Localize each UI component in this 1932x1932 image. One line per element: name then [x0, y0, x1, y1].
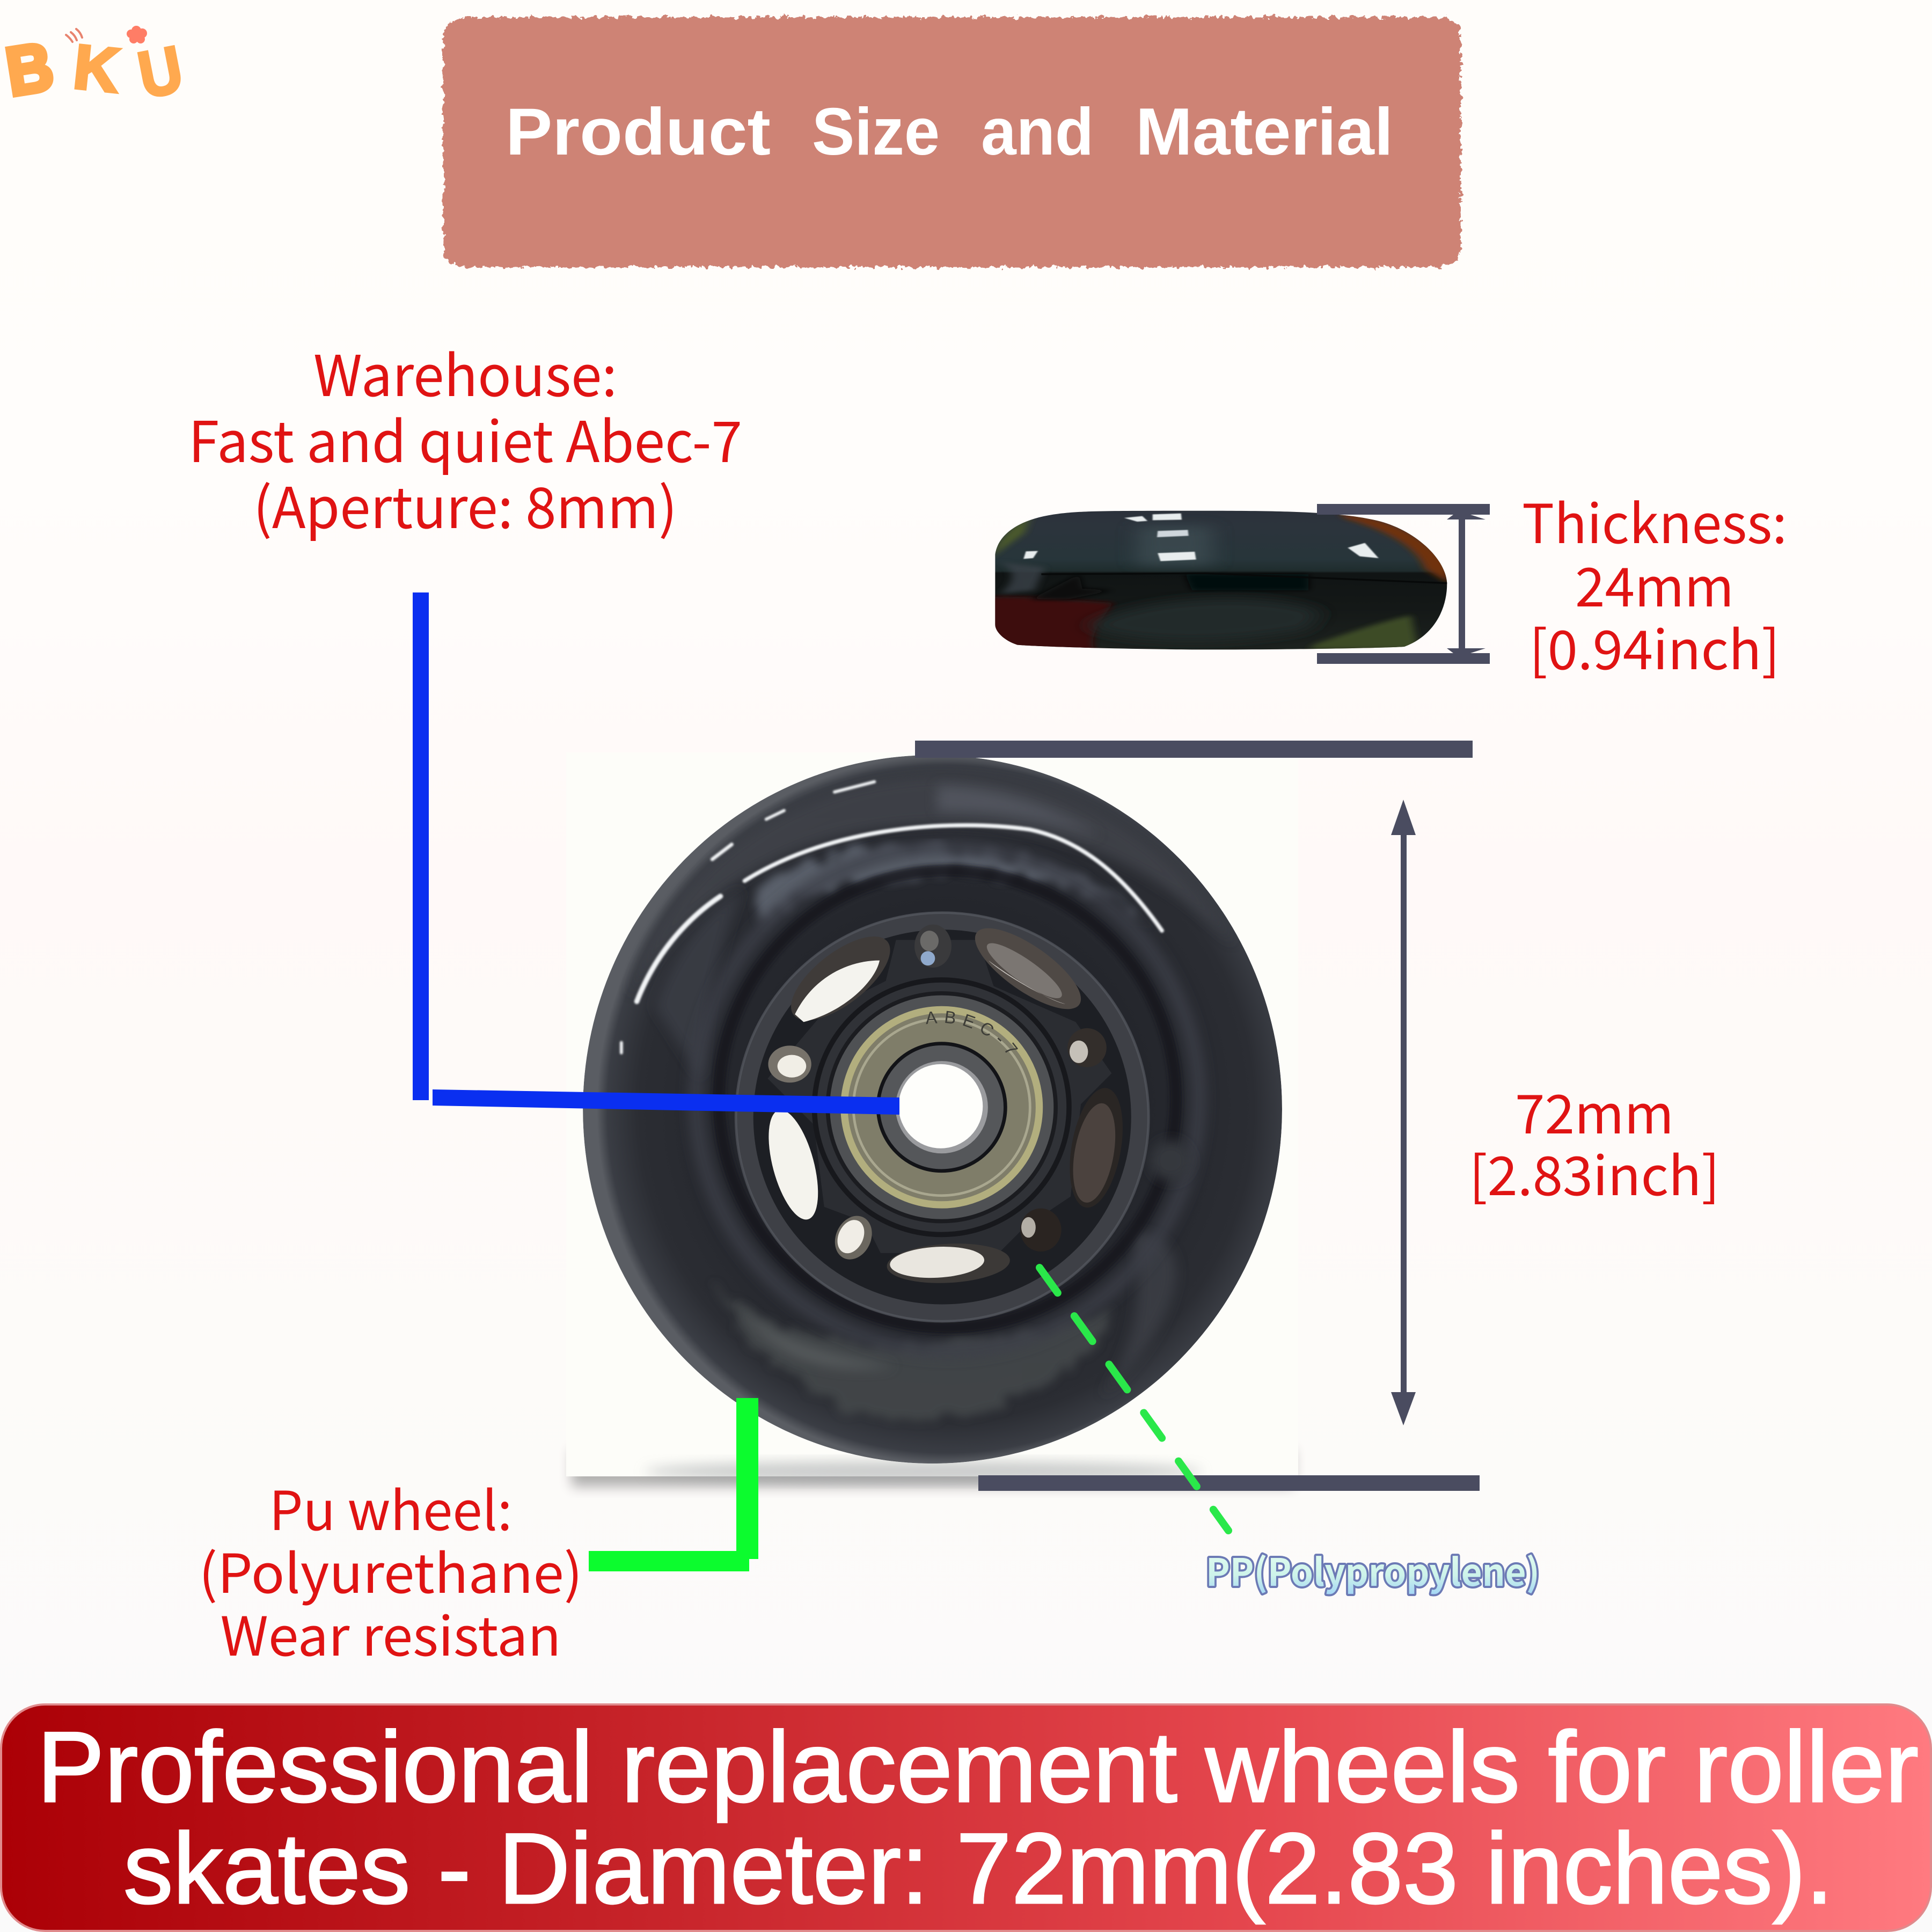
- callout: PU wheel: Wear resistan: [220, 1593, 561, 1671]
- tyre surface tones: [629, 775, 1235, 1421]
- callout: diameter: [2.83inch]: [1469, 1133, 1719, 1211]
- bearing: [826, 991, 1058, 1224]
- banner text: [37, 1711, 1919, 1924]
- title text: [506, 95, 1393, 169]
- green dashed leader to hub: [1040, 1268, 1228, 1531]
- title banner: [443, 17, 1461, 267]
- hub star plate: [767, 940, 1111, 1253]
- logo letter U: U: [133, 32, 188, 112]
- diameter top bar: [915, 741, 1473, 758]
- callout: polypropylene: PP(Polypropylene): [1206, 1543, 1540, 1597]
- title text: Size: [812, 95, 940, 169]
- logo flower: [127, 26, 147, 43]
- banner background: [1, 1704, 1931, 1931]
- front view wheel photo: [564, 756, 1301, 1494]
- diameter arrow: [1391, 800, 1416, 1425]
- callout: diameter: 72mm: [1515, 1071, 1674, 1149]
- callout: PU wheel: (Polyurethane): [199, 1531, 583, 1608]
- logo: BKU: [1, 26, 188, 112]
- tyre highlights: [621, 782, 1162, 1053]
- tyre: [583, 755, 1282, 1463]
- bearing bore: [898, 1064, 983, 1148]
- callout: warehouse bearing: (Aperture: 8mm): [253, 463, 677, 545]
- title text: and: [981, 95, 1094, 169]
- blue leader line to bearing: [413, 592, 899, 1115]
- callout: warehouse bearing: Fast and quiet Abec-7: [188, 397, 742, 479]
- logo sound arcs: [66, 29, 82, 42]
- bearing marking: ABEC-7: [926, 1011, 1018, 1053]
- callout: warehouse bearing: [188, 331, 742, 545]
- photo background with shadow: [566, 752, 1298, 1487]
- callout: PU wheel: Pu wheel:: [269, 1468, 512, 1546]
- callout: thickness: 24mm: [1575, 544, 1734, 622]
- diameter bottom bar: [978, 1475, 1480, 1491]
- title text: Material: [1136, 95, 1393, 169]
- banner shape: [443, 17, 1461, 267]
- hub windows: [759, 914, 1131, 1286]
- thickness dimension marker: [1317, 504, 1490, 664]
- callout: warehouse bearing: Warehouse:: [313, 331, 617, 413]
- logo letter K: K: [70, 32, 122, 106]
- logo letter B: B: [1, 28, 58, 110]
- banner text: skates - Diameter: 72mm(2.83 inches).: [123, 1812, 1833, 1924]
- PP hub: [736, 913, 1148, 1321]
- side view wheel photo: [986, 508, 1455, 653]
- callout: thickness: [1522, 481, 1787, 685]
- callout: diameter: [1469, 1071, 1719, 1211]
- callout: thickness: [0.94inch]: [1529, 607, 1780, 685]
- title text: Product: [506, 95, 771, 169]
- callout: thickness: Thickness:: [1522, 481, 1787, 559]
- green leader line to tyre: [589, 1398, 758, 1571]
- banner text: Professional replacement wheels for roller: [37, 1711, 1919, 1823]
- hub bolt holes: [768, 925, 1107, 1265]
- callout: PU wheel: [199, 1468, 583, 1671]
- bottom banner: [1, 1704, 1931, 1931]
